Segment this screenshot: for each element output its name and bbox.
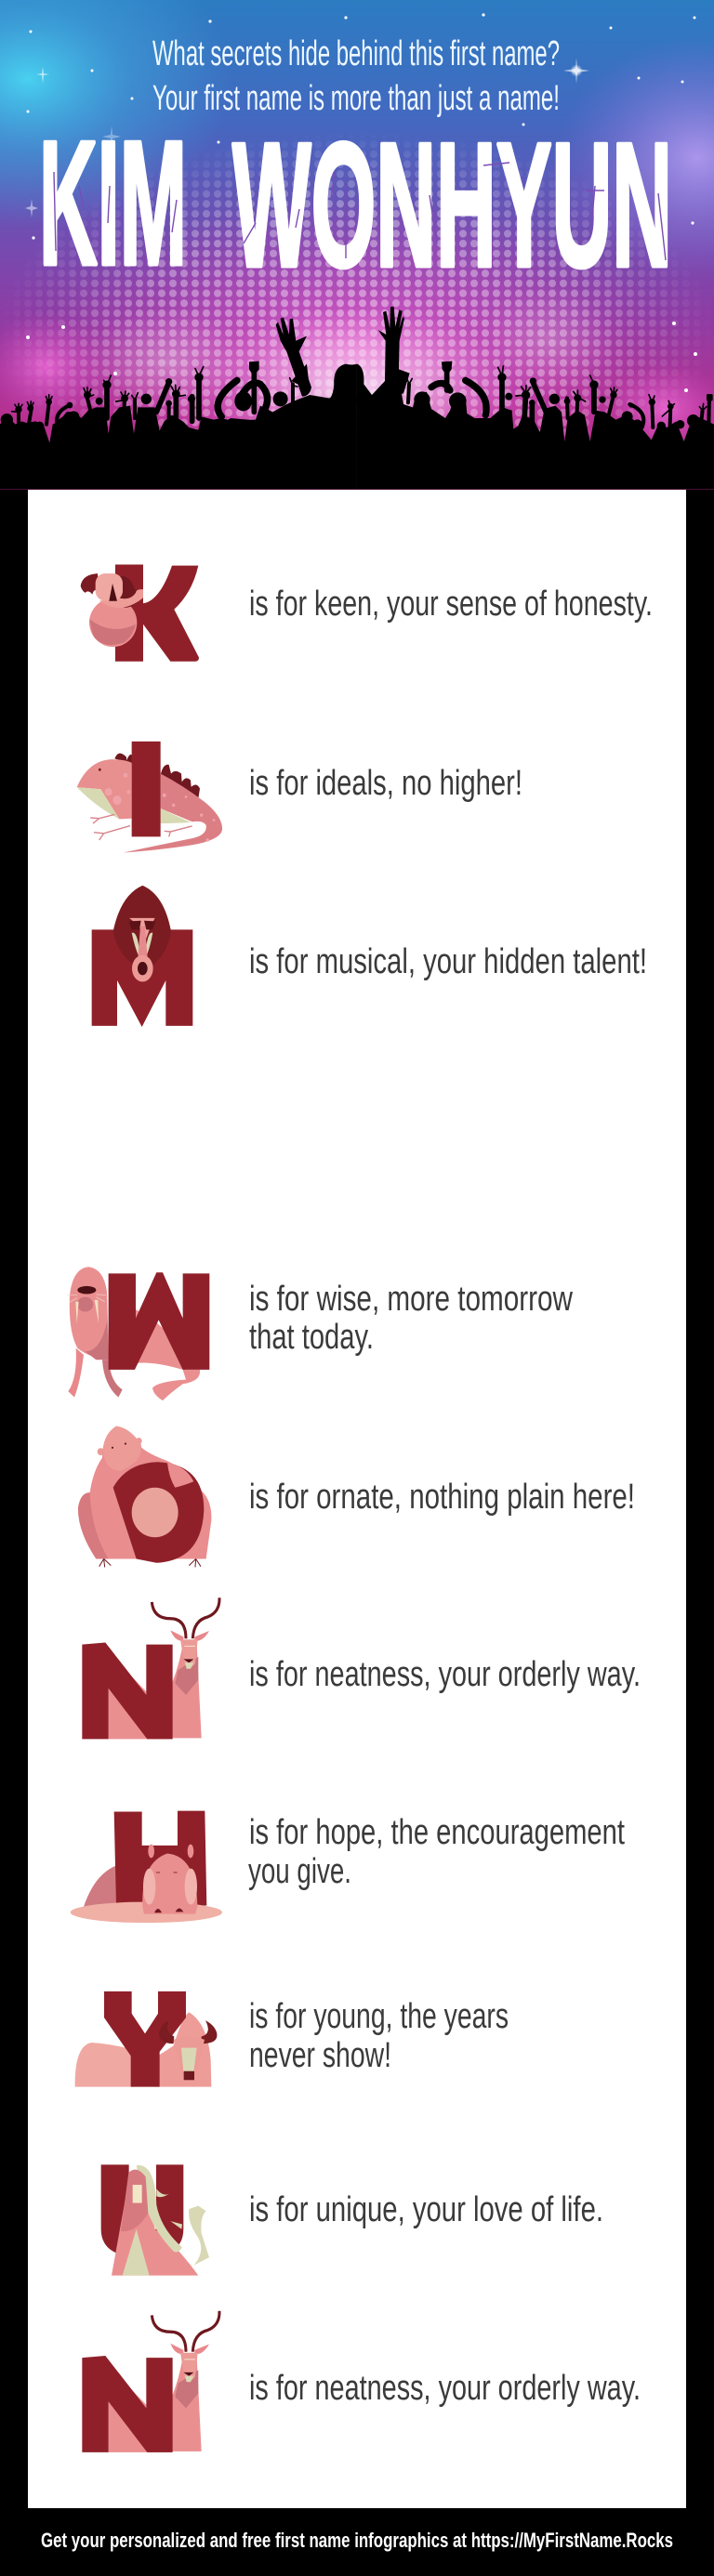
arms around head (431, 380, 486, 415)
left mass (0, 395, 357, 490)
icon: O mole (78, 1426, 211, 1567)
row: letter U (101, 2164, 603, 2276)
subtitle text (152, 34, 560, 118)
row: letter H (71, 1811, 625, 1923)
sparkles (25, 13, 697, 392)
text: W: is for wise, more tomorrow (249, 1280, 573, 1319)
row: letter M (92, 886, 647, 1027)
raised arm and hand (276, 318, 311, 397)
row: letter I (77, 742, 522, 852)
text: Y: is for young, the years (249, 1997, 509, 2036)
row: letter N second (82, 2311, 641, 2452)
row: letter N (82, 1597, 641, 1739)
icon: H hippo (71, 1811, 222, 1923)
icon: N antelope (82, 1597, 219, 1739)
row: letter O (78, 1426, 635, 1567)
arms around head (218, 380, 268, 416)
text: H: you give. (248, 1852, 351, 1891)
stage light background (0, 0, 714, 511)
crowd right half (357, 307, 714, 490)
icon: K koala (81, 564, 199, 662)
white content panel (28, 490, 686, 2508)
text: W (249, 1280, 573, 1357)
center head and raised arm (357, 307, 410, 400)
row: letter K (81, 564, 653, 662)
text: H (248, 1813, 625, 1891)
header concert banner (0, 0, 714, 511)
icon: U horse (101, 2164, 209, 2276)
text: W: that today. (249, 1318, 374, 1357)
text: U: is for unique, your love of life. (249, 2190, 603, 2229)
row: letter Y (75, 1991, 509, 2087)
text: Y: never show! (249, 2036, 391, 2075)
icon: M mandrill (92, 886, 192, 1027)
right mass (357, 378, 714, 490)
center figure (328, 364, 357, 402)
title: KIM WONHYUN (39, 105, 672, 304)
icon: W walrus (68, 1267, 209, 1400)
crowd silhouette (0, 307, 714, 490)
icon: Y buffalo (75, 1991, 217, 2087)
row: letter W (68, 1267, 573, 1400)
title: KIM WONHYUN: KIM (39, 105, 187, 302)
icon: I iguana (77, 742, 222, 852)
text: I: is for ideals, no higher! (249, 764, 522, 803)
crowd left half (0, 318, 357, 490)
text: Y (249, 1997, 509, 2075)
icon: N antelope second (82, 2311, 219, 2452)
